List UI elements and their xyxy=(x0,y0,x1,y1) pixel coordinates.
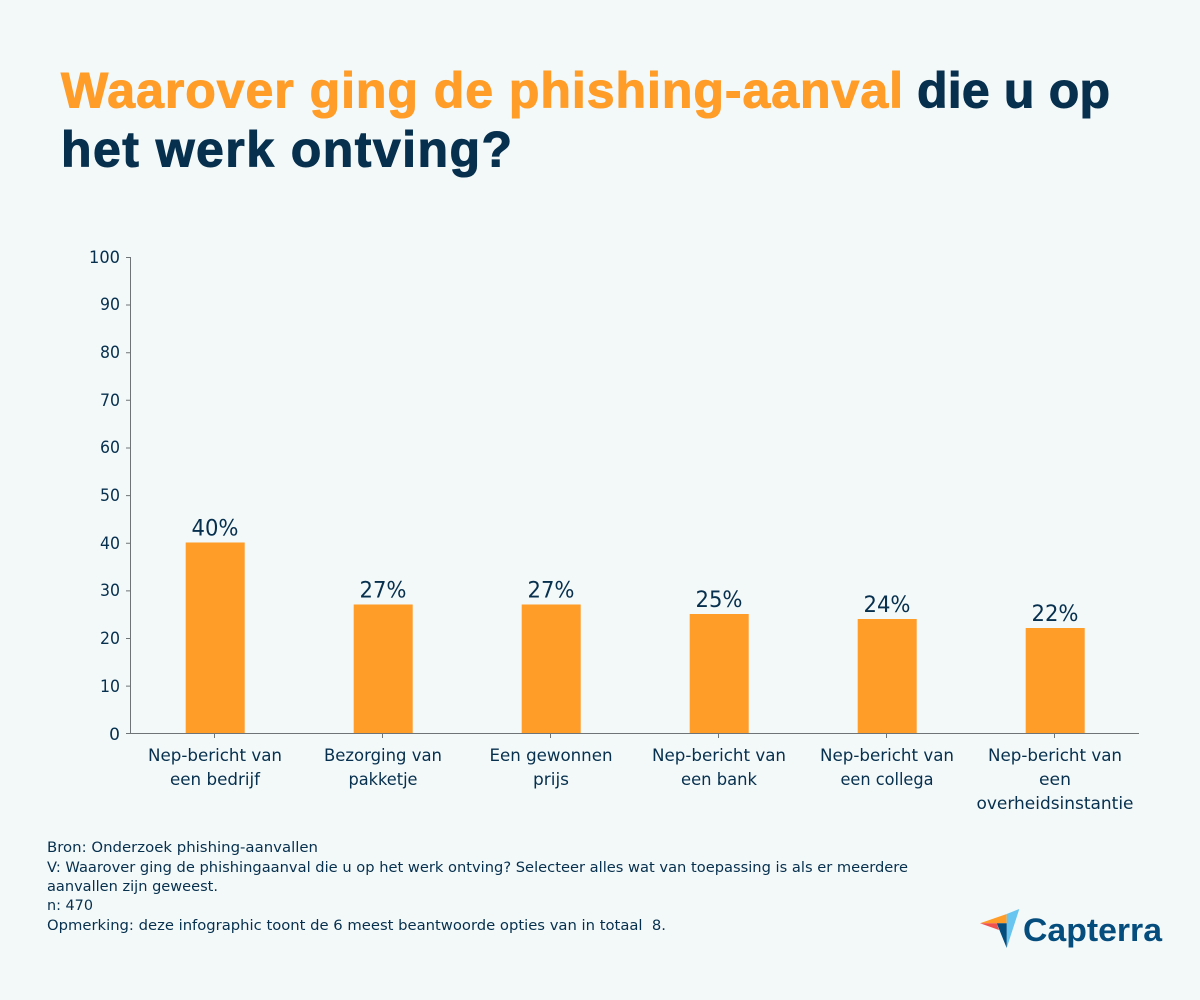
title: Waarover ging de phishing-aanval xyxy=(61,62,903,118)
source notes: Bron: Onderzoek phishing-aanvallen xyxy=(47,839,318,856)
value labels: 22% xyxy=(1032,601,1078,627)
category labels: Nep-bericht van xyxy=(820,745,954,765)
y axis: 30 xyxy=(100,581,120,601)
category labels: een bedrijf xyxy=(170,769,261,789)
title: die u op xyxy=(917,62,1110,118)
x axis xyxy=(126,734,1139,738)
y axis: 90 xyxy=(100,295,120,315)
value labels: 27% xyxy=(360,578,406,604)
category labels: Nep-bericht van xyxy=(988,745,1122,765)
value labels: 25% xyxy=(696,587,742,613)
bars xyxy=(186,542,1085,734)
y axis: 20 xyxy=(100,629,120,649)
category labels: pakketje xyxy=(348,769,418,789)
y axis: 0 xyxy=(109,725,120,745)
category labels: een collega xyxy=(840,769,934,789)
Capterra logo xyxy=(980,909,1162,948)
category labels: Bezorging van xyxy=(324,745,442,765)
y axis: 80 xyxy=(100,343,120,363)
value labels: 24% xyxy=(864,592,910,618)
category labels xyxy=(148,745,1134,813)
source notes: n: 470 xyxy=(47,897,93,914)
source notes: aanvallen zijn geweest. xyxy=(47,878,218,895)
category labels: een xyxy=(1039,769,1071,789)
y axis: 10 xyxy=(100,677,120,697)
value labels xyxy=(192,516,1078,627)
category labels: prijs xyxy=(533,769,569,789)
source notes xyxy=(47,839,908,934)
y axis: 40 xyxy=(100,534,120,554)
category labels: Een gewonnen xyxy=(490,745,612,765)
y axis: 100 xyxy=(89,248,120,268)
title: het werk ontving? xyxy=(61,122,512,178)
icon: Capterra arrow xyxy=(980,909,1019,948)
category labels: Nep-bericht van xyxy=(652,745,786,765)
category labels: overheidsinstantie xyxy=(976,793,1134,813)
category labels: een bank xyxy=(681,769,757,789)
y axis: 50 xyxy=(100,486,120,506)
category labels: Nep-bericht van xyxy=(148,745,282,765)
title xyxy=(61,62,1110,178)
bar chart xyxy=(89,248,1139,813)
value labels: 27% xyxy=(528,578,574,604)
y axis: 60 xyxy=(100,438,120,458)
source notes: V: Waarover ging de phishingaanval die u op het werk ontving? Selecteer alles wat van toepassing is als er meerdere xyxy=(47,859,908,876)
value labels: 40% xyxy=(192,516,238,542)
Capterra logo: Capterra xyxy=(1023,912,1162,948)
y axis xyxy=(89,248,130,745)
source notes: Opmerking: deze infographic toont de 6 meest beantwoorde opties van in totaal 8. xyxy=(47,917,666,934)
y axis: 70 xyxy=(100,391,120,411)
